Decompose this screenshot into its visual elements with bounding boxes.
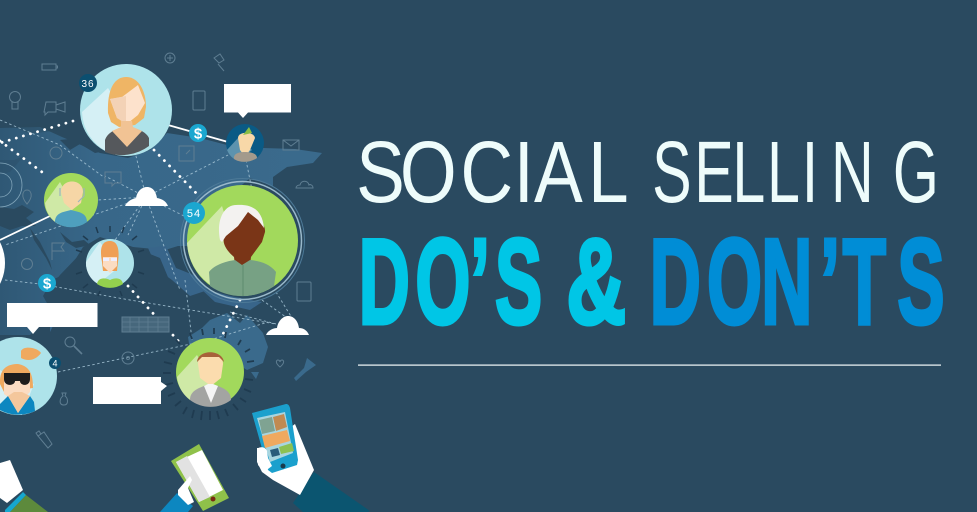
icon: plus circle [165,53,175,63]
icon: video camera [44,102,65,115]
avatar: woman with sunglasses [0,337,61,415]
hand holding blue phone [252,404,370,512]
world map [0,122,322,381]
icon: usb stick [36,431,52,448]
faint background icons [10,53,313,448]
avatar: headset man [44,173,98,227]
icon: flag [52,243,64,260]
rings at left edge [0,163,22,207]
avatar: person with glasses [76,226,144,296]
icon: gear [50,147,62,159]
badge: 4: 4 [52,358,58,368]
left edge white circle [0,217,5,309]
icon: note [105,172,121,186]
icon: tablet [193,91,205,110]
hand bottom left [0,460,48,512]
network dashed lines [0,120,292,372]
icon: small cloud [296,181,313,188]
badge: 36: 36 [81,79,95,90]
avatar: old person with rings [180,178,304,302]
icon: map marker [23,190,31,204]
white connector line: woman to small person [168,125,228,142]
icon: search [65,337,82,354]
icon: pause circle [22,258,32,270]
white dotted connector lines [0,121,240,345]
phone: green [171,444,229,511]
icon: battery [42,64,58,70]
title: DO'S & [359,215,626,350]
title: SOCIAL SELLING: SOCIAL [356,124,629,221]
hand holding green phone [160,444,229,512]
cloud centre [125,187,168,206]
dollar badge top: $ [194,126,203,142]
icon: heart [276,360,284,367]
icon: target [122,352,134,364]
icon: pin [214,54,224,71]
title: DO'S &: DO’S [359,215,542,350]
title: SOCIAL SELLING: SELLING [652,124,939,221]
cloud right [266,316,309,335]
icon: envelope [283,140,299,150]
dollar badge top [189,124,207,142]
icon: money bag [60,393,68,405]
avatar: man with ticks [163,328,254,420]
dollar badge lower: $ [43,276,52,292]
badge: 54: 54 [187,208,201,220]
icon: tablet lower [297,282,311,301]
dollar badge lower [38,274,56,292]
title: DON'TS: DON’TS [650,215,945,350]
white connector line: left edge to headset man [0,216,50,240]
divider under title [358,364,941,366]
speech bubble lower [93,377,167,404]
icon: clock square [179,146,194,161]
avatar: small person [226,124,264,162]
title: DO'S &: & [566,215,626,350]
icon: keyboard [122,317,169,332]
speech bubble left [7,303,98,334]
speech bubble top right [224,84,291,118]
title: SOCIAL SELLING [356,124,939,221]
phone: blue with screen [252,404,298,473]
avatar: woman 36 [79,64,172,156]
icon: light bulb [10,92,20,109]
